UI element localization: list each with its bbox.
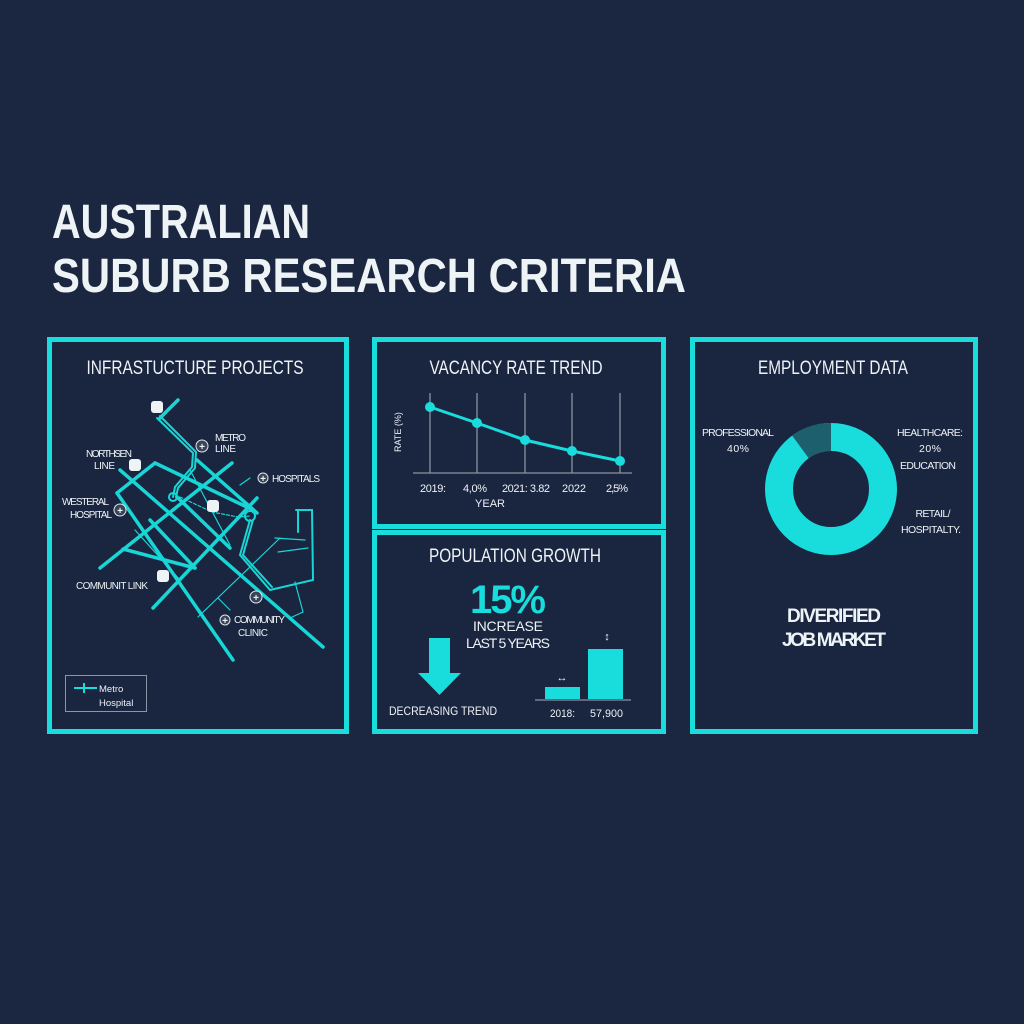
line chart: 2021: 3.82 [502,483,550,495]
legend: Hospital [99,698,133,709]
icon: down arrow [418,638,461,695]
big stat: LAST 5 YEARS [466,635,550,651]
panel: employment data [692,340,976,732]
map labels: METRO [215,433,246,444]
icon: hospitals: + [260,474,266,485]
caption [782,606,886,651]
donut labels [702,427,963,536]
bar chart [535,631,631,720]
big stat [466,578,550,651]
big stat: 15% [470,578,546,622]
panel: infrastructure projects [50,340,346,732]
icon: hospitals: + [222,616,228,627]
donut labels: 40% [727,443,749,455]
map labels: LINE [215,444,236,455]
line chart: YEAR [475,498,505,510]
line chart: 2022 [562,483,586,495]
map labels: NORTHSEN [86,449,132,460]
caption: DIVERIFIED [787,606,881,627]
map labels: CLINIC [238,628,268,639]
line chart: 2,5% [606,483,628,495]
bar chart: ↕ [604,631,610,643]
map [100,400,323,660]
panel: vacancy rate trend [374,340,664,526]
title: SUBURB RESEARCH CRITERIA [52,250,686,303]
map labels: WESTERAL [62,497,109,508]
icon: hospitals: + [253,593,259,604]
donut labels: RETAIL/ [916,508,951,520]
bar chart: 57,900 [590,708,623,720]
heading: infrastructure: INFRASTUCTURE PROJECTS [86,358,304,379]
map labels: COMMUNIT LINK [76,581,148,592]
icon: hospitals [114,440,268,627]
line chart: 2019: [420,483,446,495]
big stat: INCREASE [473,618,543,634]
line chart: RATE (%) [393,412,403,452]
donut labels: HOSPITALTY. [901,524,961,536]
map labels: HOSPITAL [70,510,112,521]
bar chart: 2018: [550,708,575,720]
map labels [62,433,320,639]
icon: hospitals: + [199,442,205,453]
heading: employment: EMPLOYMENT DATA [758,358,908,379]
heading: population: POPULATION GROWTH [429,546,601,567]
donut labels: HEALTHCARE: [897,427,963,439]
map labels: HOSPITALS [272,474,320,485]
icon: hospitals: + [117,506,123,517]
map labels: LINE [94,461,115,472]
legend [66,676,146,712]
title [52,196,686,303]
map labels: COMMUNITY [234,615,285,626]
line chart [393,393,632,510]
donut labels: PROFESSIONAL [702,427,774,439]
panel: population growth: DECREASING TREND [389,704,497,718]
heading: vacancy: VACANCY RATE TREND [430,358,602,379]
donut labels: 20% [919,443,941,455]
caption: JOB MARKET [782,630,886,651]
panel: population growth [374,532,664,732]
donut chart [779,423,883,541]
donut labels: EDUCATION [900,460,956,472]
title: AUSTRALIAN [52,196,310,249]
legend: Metro [99,684,123,695]
icon: trains [129,401,219,582]
line chart: 4,0% [463,483,487,495]
bar chart: ↔ [556,672,568,684]
